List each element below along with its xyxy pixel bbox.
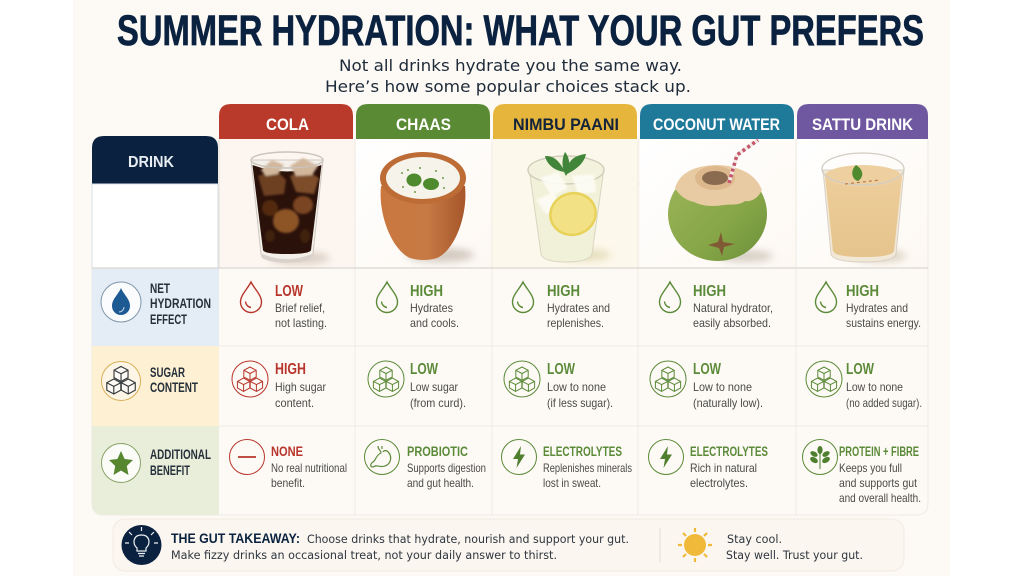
coconut benefit: electrolytes: Rich in natural [690,462,757,475]
row label: additional benefit: ADDITIONAL [150,447,211,462]
row label: sugar content: SUGAR [150,365,185,380]
nimbu benefit: electrolytes: Replenishes minerals [543,462,632,475]
grid lines [92,139,928,515]
nimbu hydration: high [512,282,610,330]
cola sugar: high [232,361,326,410]
chaas benefit: probiotic: Supports digestion [407,462,486,475]
row label background: sugar [92,346,219,426]
coconut benefit: electrolytes: ELECTROLYTES [690,444,768,459]
chaas hydration: high: and cools. [410,317,459,330]
row label: net hydration effect: NET [150,281,171,296]
subtitle: Not all drinks hydrate you the same way. [339,56,682,75]
coconut sugar: low [650,361,763,410]
cola sugar: high: content. [275,397,314,410]
coconut hydration: high: easily absorbed. [693,317,771,330]
cola hydration: low [240,282,327,330]
column header: chaas [356,104,490,139]
image: chaas clay pot [380,152,474,262]
chaas hydration: high [376,282,459,330]
column header: chaas: CHAAS [396,115,451,134]
comparison table [92,104,928,515]
coconut hydration: high: Natural hydrator, [693,302,773,315]
sattu hydration: high: sustains energy. [846,317,921,330]
nimbu sugar: low: Low to none [547,381,606,394]
chaas sugar: low: LOW [410,361,438,378]
cola hydration: low: not lasting. [275,317,327,330]
cola sugar: high: HIGH [275,361,306,378]
cola benefit: none: benefit. [271,477,305,490]
sattu benefit: protein + fibre: Keeps you full [839,462,902,475]
sattu benefit: protein + fibre: and overall health. [839,492,921,505]
coconut hydration: high [660,282,773,330]
coconut benefit: electrolytes: electrolytes. [690,477,748,490]
chaas sugar: low: Low sugar [410,381,458,394]
column header: sattu drink [797,104,928,139]
row label: additional benefit: BENEFIT [150,463,191,478]
row label: sugar content [102,362,199,400]
nimbu sugar: low: LOW [547,361,575,378]
sattu sugar: low: (no added sugar). [846,397,922,410]
nimbu benefit: electrolytes [502,440,632,490]
image: cola glass [251,152,330,264]
cola hydration: low: LOW [275,283,303,300]
image: nimbu paani glass [528,152,611,262]
icon: light bulb [122,525,162,565]
column header: coconut water [640,104,794,139]
cola sugar: high: High sugar [275,381,326,394]
sattu hydration: high: HIGH [846,283,879,300]
cola hydration: low: Brief relief, [275,302,325,315]
chaas benefit: probiotic: and gut health. [407,477,474,490]
sattu sugar: low [806,361,922,410]
coconut benefit: electrolytes [648,440,768,490]
cola benefit: none: NONE [271,444,303,459]
coconut sugar: low: LOW [693,361,721,378]
nimbu hydration: high: Hydrates and [547,302,610,315]
column header: nimbu paani: NIMBU PAANI [513,115,619,134]
takeaway text [171,531,629,562]
nimbu hydration: high: HIGH [547,283,580,300]
sattu benefit: protein + fibre: and supports gut [839,477,918,490]
sattu hydration: high: Hydrates and [846,302,908,315]
column header: sattu drink: SATTU DRINK [812,115,914,134]
drink header cell [92,136,218,184]
column header: cola: COLA [266,115,309,134]
empty label cell under drink header [92,184,218,268]
nimbu benefit: electrolytes: lost in sweat. [543,477,601,490]
image cell backgrounds [219,139,928,268]
row label: additional benefit [102,444,211,482]
coconut sugar: low: (naturally low). [693,397,763,410]
chaas sugar: low [368,361,466,410]
sattu sugar: low: Low to none [846,381,903,394]
sattu benefit: protein + fibre [802,440,921,505]
takeaway text: Make fizzy drinks an occasional treat, not your daily answer to thirst. [171,548,557,562]
nimbu hydration: high: replenishes. [547,317,604,330]
chaas hydration: high: Hydrates [410,302,453,315]
closing message: Stay cool. [727,532,782,546]
column header: cola [219,104,353,139]
row label: net hydration effect: HYDRATION [150,296,211,311]
table body background [92,184,928,515]
chaas sugar: low: (from curd). [410,397,466,410]
row label background: benefit [92,426,219,515]
row label: sugar content: CONTENT [150,380,199,395]
chaas benefit: probiotic [364,440,486,490]
nimbu benefit: electrolytes: ELECTROLYTES [543,444,622,459]
sattu hydration: high [816,282,921,330]
cola benefit: none [230,440,347,490]
nimbu sugar: low: (if less sugar). [547,397,613,410]
closing message: Stay well. Trust your gut. [726,548,863,562]
takeaway text: THE GUT TAKEAWAY: [171,531,300,546]
image: coconut with straw [668,140,773,262]
cola benefit: none: No real nutritional [271,462,347,475]
coconut sugar: low: Low to none [693,381,752,394]
image: sattu drink glass [822,153,906,262]
icon: sun [678,528,712,562]
row label: net hydration effect [101,281,211,327]
chaas hydration: high: HIGH [410,283,443,300]
coconut hydration: high: HIGH [693,283,726,300]
chaas benefit: probiotic: PROBIOTIC [407,444,468,459]
sattu benefit: protein + fibre: PROTEIN + FIBRE [839,444,919,459]
column header: coconut water: COCONUT WATER [653,115,780,134]
subtitle: Here’s how some popular choices stack up. [325,77,691,96]
takeaway text: Choose drinks that hydrate, nourish and support your gut. [307,532,629,546]
drink header cell: DRINK [128,154,175,171]
row label: net hydration effect: EFFECT [150,312,188,327]
nimbu sugar: low [504,361,613,410]
row label background: net hydration [92,268,219,346]
closing message [726,532,863,562]
column header: nimbu paani [493,104,637,139]
subtitle [325,56,691,96]
takeaway panel [113,519,904,571]
sattu sugar: low: LOW [846,361,874,378]
